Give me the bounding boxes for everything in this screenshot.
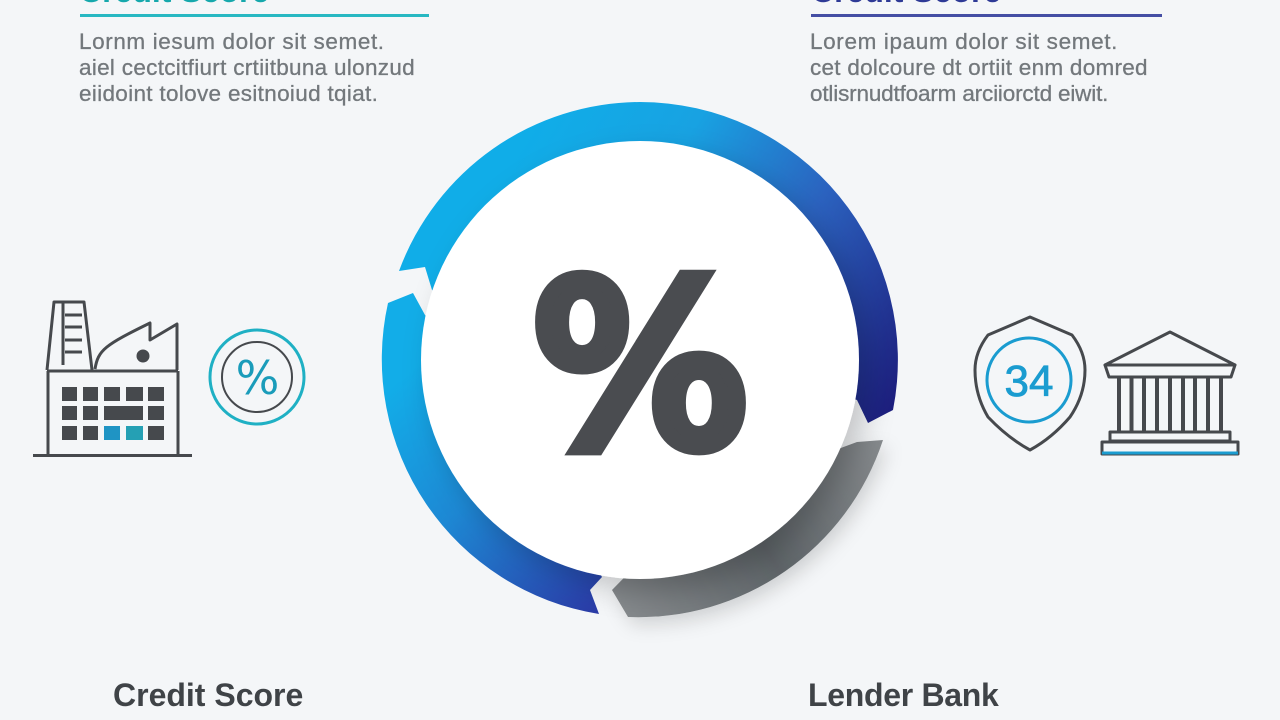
percent symbol: % [530, 236, 751, 498]
text block: left [79, 29, 415, 106]
icon: factory [33, 302, 192, 456]
icon: percent badge [210, 330, 304, 424]
icon: shield with number [975, 317, 1085, 450]
text block: right: otlisrnudtfoarm arciiorctd eiwit. [810, 81, 1108, 106]
text block: right: Lorem ipaum dolor sit semet. [810, 29, 1118, 54]
central white circle [421, 141, 859, 579]
ring segment: blue left to indigo bottom [382, 293, 602, 614]
ring segment: gray lower right [612, 440, 883, 617]
icon: shield with number: 34 [1005, 357, 1053, 406]
rule: right [811, 14, 1162, 17]
label: lender bank: Lender Bank [808, 677, 999, 713]
text block: left: Lornm iesum dolor sit semet. [79, 29, 385, 54]
icon: bank building [1102, 332, 1238, 454]
text block: right: cet dolcoure dt ortiit enm domred [810, 55, 1148, 80]
label: credit score: Credit Score [113, 677, 303, 713]
text block: left: aiel cectcitfiurt crtiitbuna ulonzud [79, 55, 415, 80]
text block: left: eiidoint tolove esitnoiud tqiat. [79, 81, 378, 106]
text block: right [810, 29, 1148, 106]
icon: percent badge: % [236, 351, 279, 405]
rule: left [80, 14, 429, 17]
ring segment: blue top to navy right [399, 102, 898, 423]
